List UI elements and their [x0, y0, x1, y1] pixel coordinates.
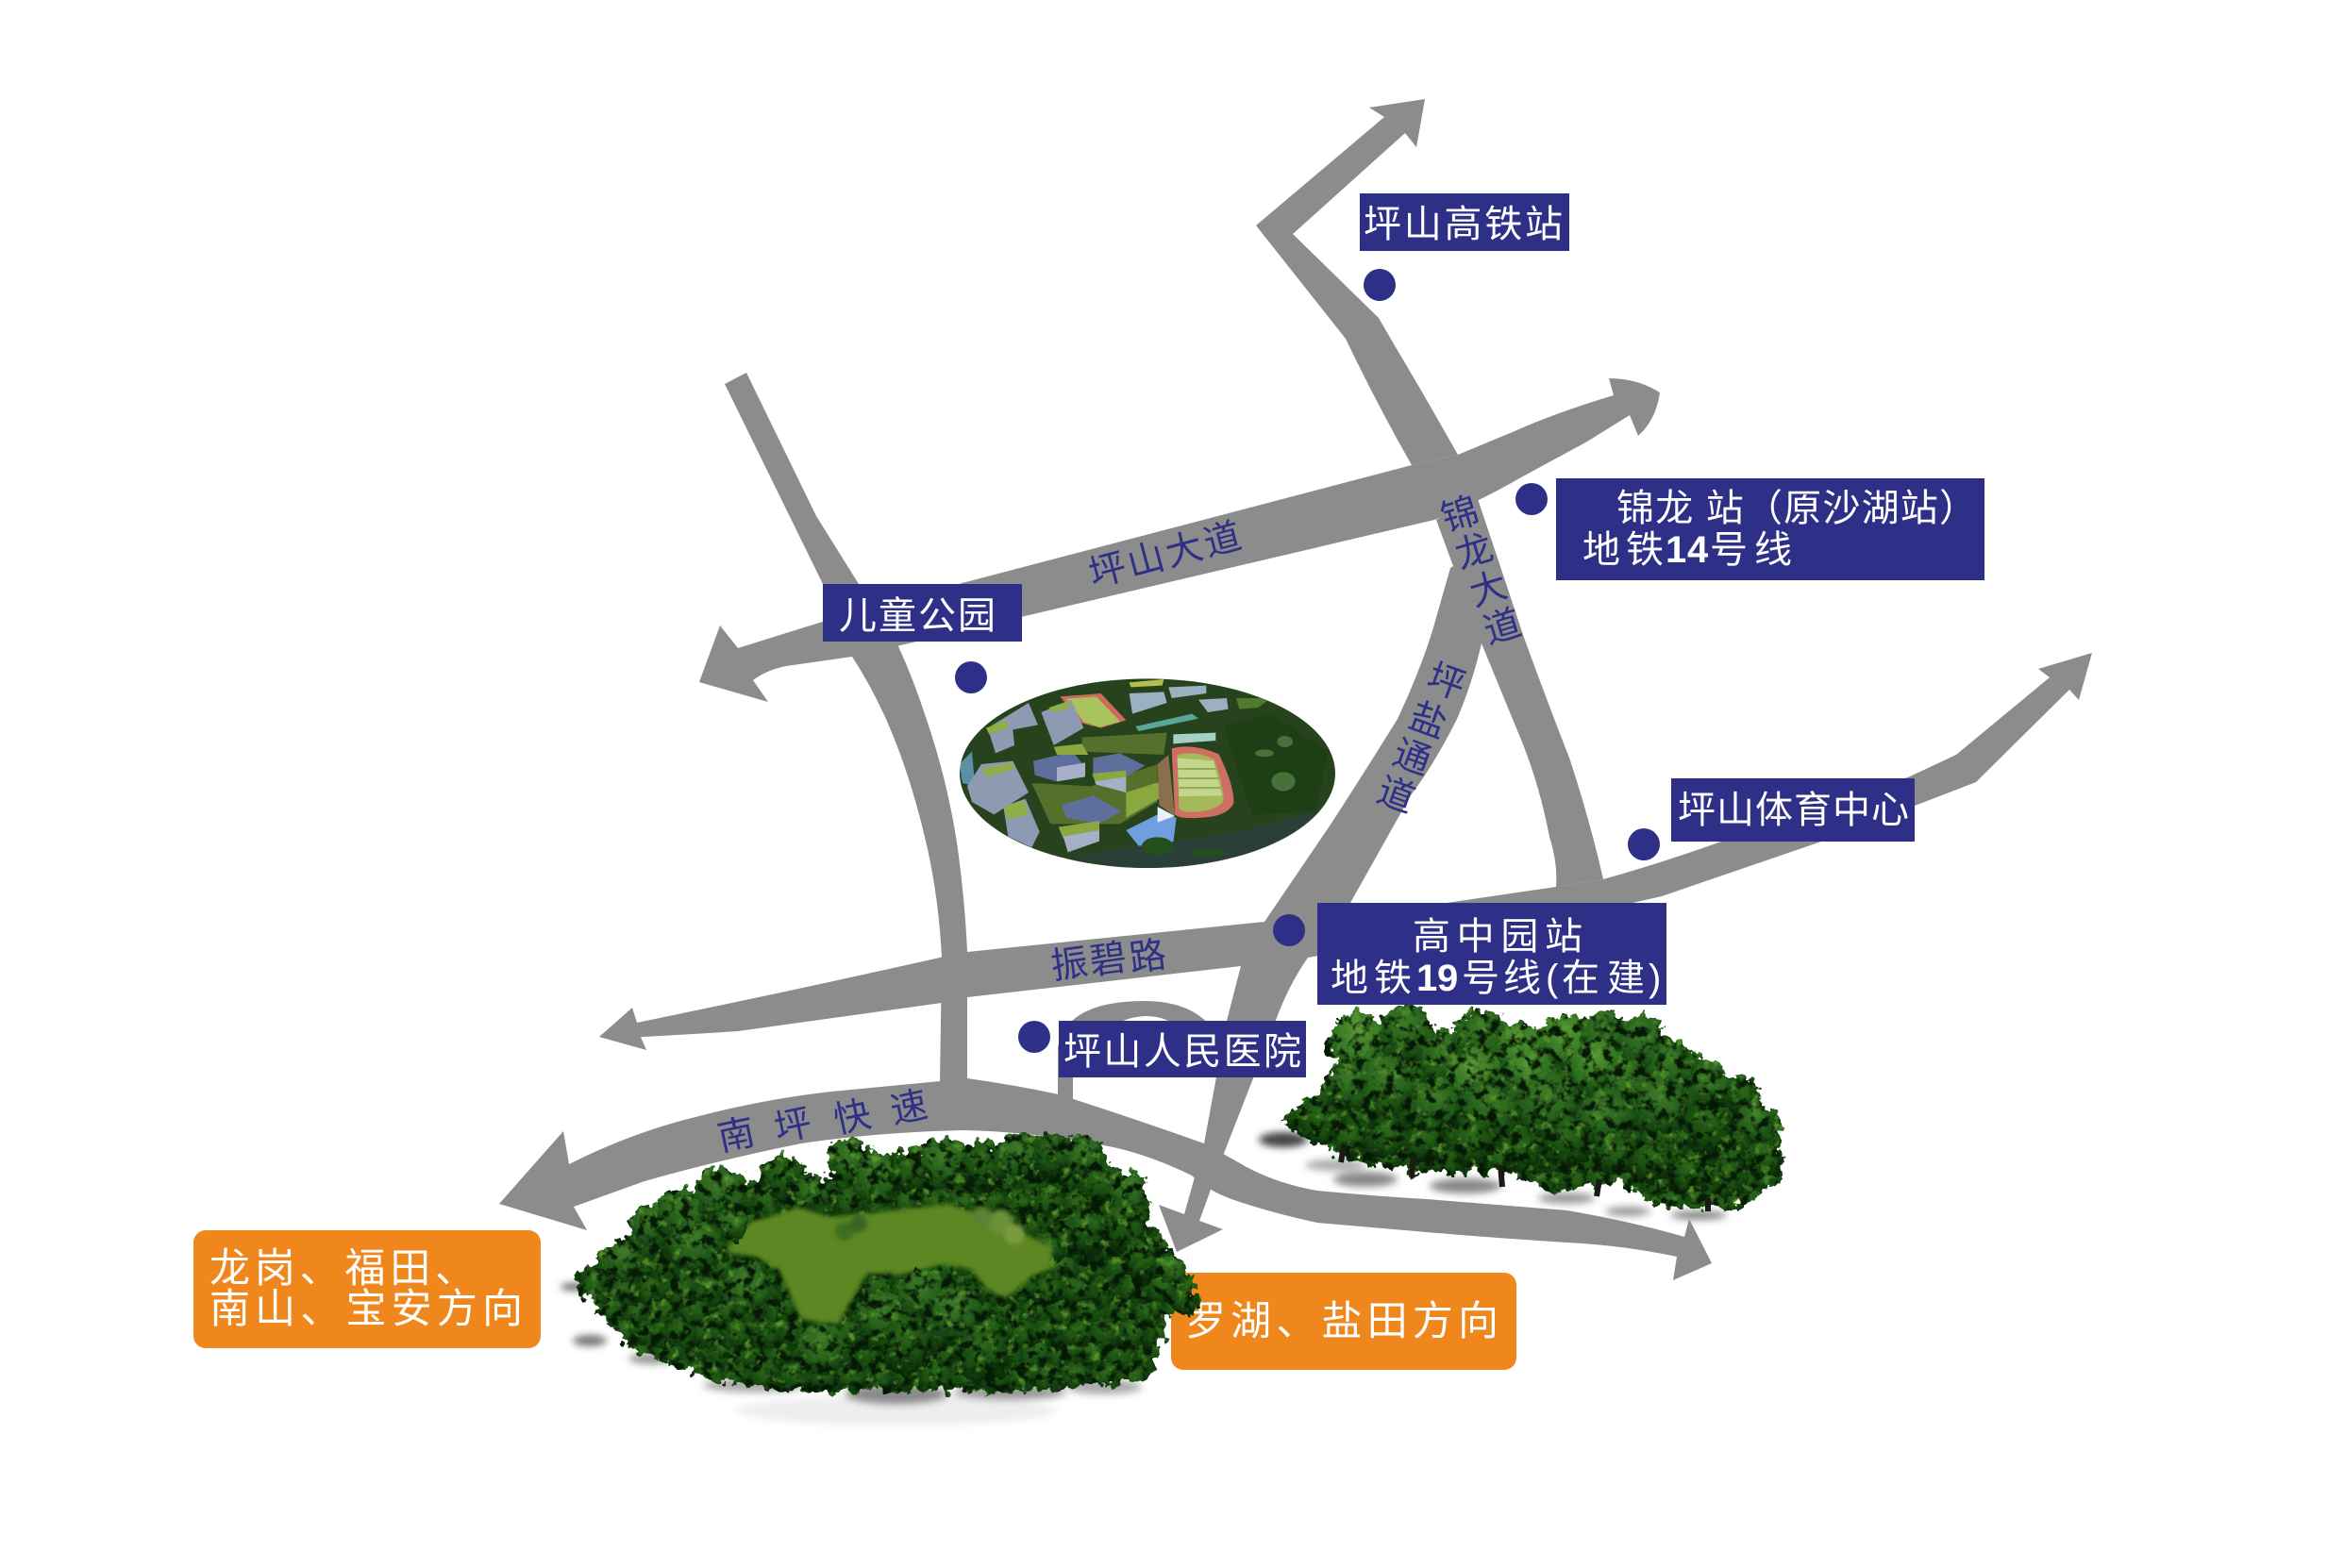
orange box: Luohu, Yantian direction — [1171, 1273, 1516, 1370]
road: north to high-speed station — [1256, 99, 1458, 465]
orange box: Luohu, Yantian direction: 罗湖、盐田方向 — [1185, 1299, 1498, 1344]
campus teaching buildings — [1033, 752, 1145, 824]
orange box: Longgang, Futian direction: 龙岗、福田、 — [209, 1246, 476, 1292]
location map — [193, 99, 2092, 1426]
road name labels — [714, 491, 1526, 1159]
road: west road — [725, 373, 967, 1085]
road: Pingshan Avenue — [699, 378, 1660, 702]
forest shadow — [561, 1283, 1142, 1426]
road: hospital loop — [1058, 1001, 1213, 1099]
label: Gaozhongyuan station, Metro Line 19: 高中园站 — [1413, 916, 1582, 958]
dot: people's hospital — [1018, 1021, 1050, 1053]
campus residential towers — [967, 700, 1083, 847]
label: Jinlong station, Metro Line 14: 锦龙 站（原沙湖站） — [1616, 488, 1977, 529]
ring of tree crowns — [604, 1133, 1198, 1382]
grove canopy base — [1281, 1024, 1783, 1210]
label: Jinlong Avenue: 锦 — [1436, 491, 1483, 540]
label: Pingshan People's Hospital: 坪山人民医院 — [1063, 1031, 1301, 1073]
label: children's park: 儿童公园 — [839, 595, 996, 637]
road network — [499, 99, 2092, 1280]
grove shadow — [1259, 1132, 1727, 1220]
label: Nanping Expressway: 快 — [830, 1094, 875, 1142]
label: Gaozhongyuan station, Metro Line 19: 号线 — [1462, 958, 1541, 999]
label: Pingyan Passage: 道 — [1372, 770, 1420, 821]
station marker dots — [955, 269, 1660, 1053]
label: Jinlong Avenue: 大 — [1465, 565, 1512, 614]
label: Pingyan Passage: 坪 — [1422, 657, 1470, 708]
label: Gaozhongyuan station, Metro Line 19 — [1317, 903, 1666, 1005]
label: Gaozhongyuan station, Metro Line 19: 19 — [1416, 958, 1458, 999]
label: Zhenbi Road: 碧 — [1087, 938, 1130, 983]
dot: high-speed station — [1364, 269, 1396, 301]
campus east forest — [1224, 714, 1329, 814]
label: Gaozhongyuan station, Metro Line 19: 地铁 — [1331, 958, 1412, 999]
label: Gaozhongyuan station, Metro Line 19: (在建) — [1546, 958, 1661, 999]
dot: Jinlong station — [1515, 483, 1548, 515]
label: Pingyan Passage: 通 — [1388, 732, 1436, 783]
road: Jinlong Avenue and Pingyan Passage — [1159, 496, 1603, 1252]
label: Pingshan sports centre — [1671, 778, 1915, 842]
label: Pingshan high-speed station — [1360, 193, 1569, 251]
label: children's park — [823, 584, 1022, 642]
campus south hall — [1158, 755, 1175, 816]
label: Jinlong station, Metro Line 14: 14 — [1666, 529, 1709, 571]
forest: right grove — [1259, 1005, 1783, 1220]
label: Nanping Expressway — [714, 1085, 931, 1159]
campus south road and trees — [1066, 811, 1318, 871]
campus yellow-lit planting — [1031, 733, 1167, 824]
label: Pingshan Avenue: 坪 — [1085, 546, 1130, 595]
campus running track — [1172, 746, 1233, 818]
label: Pingshan Avenue: 道 — [1199, 516, 1246, 564]
label: Jinlong Avenue: 龙 — [1450, 527, 1498, 576]
label: Zhenbi Road: 振 — [1048, 942, 1091, 988]
forest canopy base — [574, 1149, 1196, 1392]
label: Jinlong Avenue: 道 — [1479, 603, 1526, 652]
dot: children's park — [955, 661, 987, 693]
campus water edge — [960, 751, 974, 785]
label: Zhenbi Road: 路 — [1127, 935, 1169, 980]
dot: Gaozhongyuan station — [1273, 914, 1305, 946]
dot: sports centre — [1628, 828, 1660, 860]
campus north sports field — [1060, 693, 1126, 728]
shrubs in clearing — [835, 1207, 1025, 1244]
campus greenery base — [956, 676, 1340, 871]
orange box: Longgang, Futian direction — [193, 1230, 541, 1348]
label: Pingshan Avenue: 山 — [1123, 537, 1169, 585]
grass clearing — [725, 1204, 1053, 1325]
road: Nanping Expressway — [499, 1078, 1712, 1280]
label: Pingshan Avenue: 大 — [1162, 526, 1207, 575]
grove tree trunks — [1341, 1146, 1708, 1211]
orange box: Longgang, Futian direction: 南山、宝安方向 — [209, 1287, 523, 1332]
label: Pingyan Passage: 盐 — [1404, 695, 1452, 746]
forest: left clearing — [561, 1133, 1198, 1426]
campus north buildings — [1130, 686, 1229, 714]
campus aerial view oval — [956, 676, 1340, 871]
label: Pingshan Avenue — [1085, 516, 1246, 595]
label: Jinlong Avenue — [1436, 491, 1526, 652]
label: Nanping Expressway: 坪 — [771, 1103, 815, 1150]
road: Zhenbi Road — [599, 653, 2092, 1050]
label: Pingshan high-speed station: 坪山高铁站 — [1364, 204, 1563, 245]
label: Nanping Expressway: 速 — [887, 1085, 931, 1132]
grove tree crowns — [1298, 1005, 1783, 1198]
label: Pingshan sports centre: 坪山体育中心 — [1678, 790, 1909, 831]
label: Jinlong station, Metro Line 14: 号线 — [1710, 529, 1792, 571]
label: Nanping Expressway: 南 — [714, 1112, 759, 1159]
label: Jinlong station, Metro Line 14: 地铁 — [1582, 529, 1664, 571]
label: Jinlong station, Metro Line 14 — [1556, 478, 1984, 580]
label: Zhenbi Road — [1048, 935, 1169, 988]
label: Pingyan Passage — [1372, 657, 1470, 821]
